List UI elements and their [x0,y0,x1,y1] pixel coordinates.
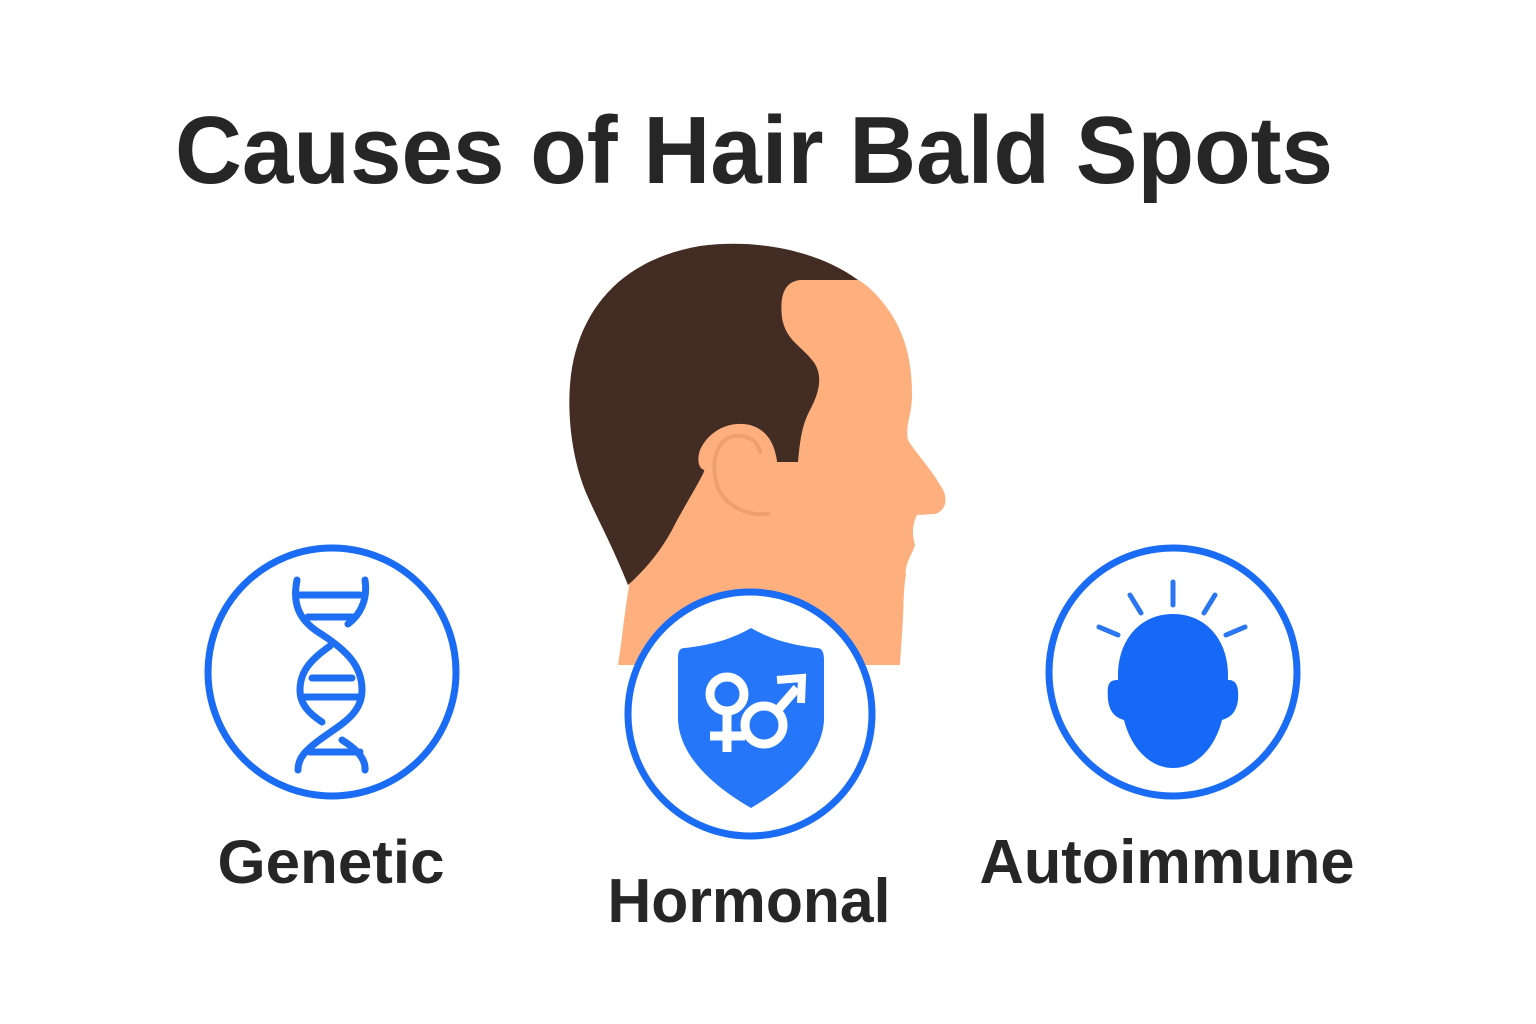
label: Hormonal: Hormonal [608,867,890,936]
title: Causes of Hair Bald Spots [175,97,1333,204]
label: Autoimmune: Autoimmune [980,828,1354,897]
label: Genetic: Genetic [218,828,444,896]
panel: autoimmune icon [1049,548,1297,796]
panel: genetic icon [208,548,456,796]
shield [678,628,824,808]
panel: hormonal icon [628,592,872,836]
illustration: head profile [569,244,945,665]
ear [703,431,798,517]
